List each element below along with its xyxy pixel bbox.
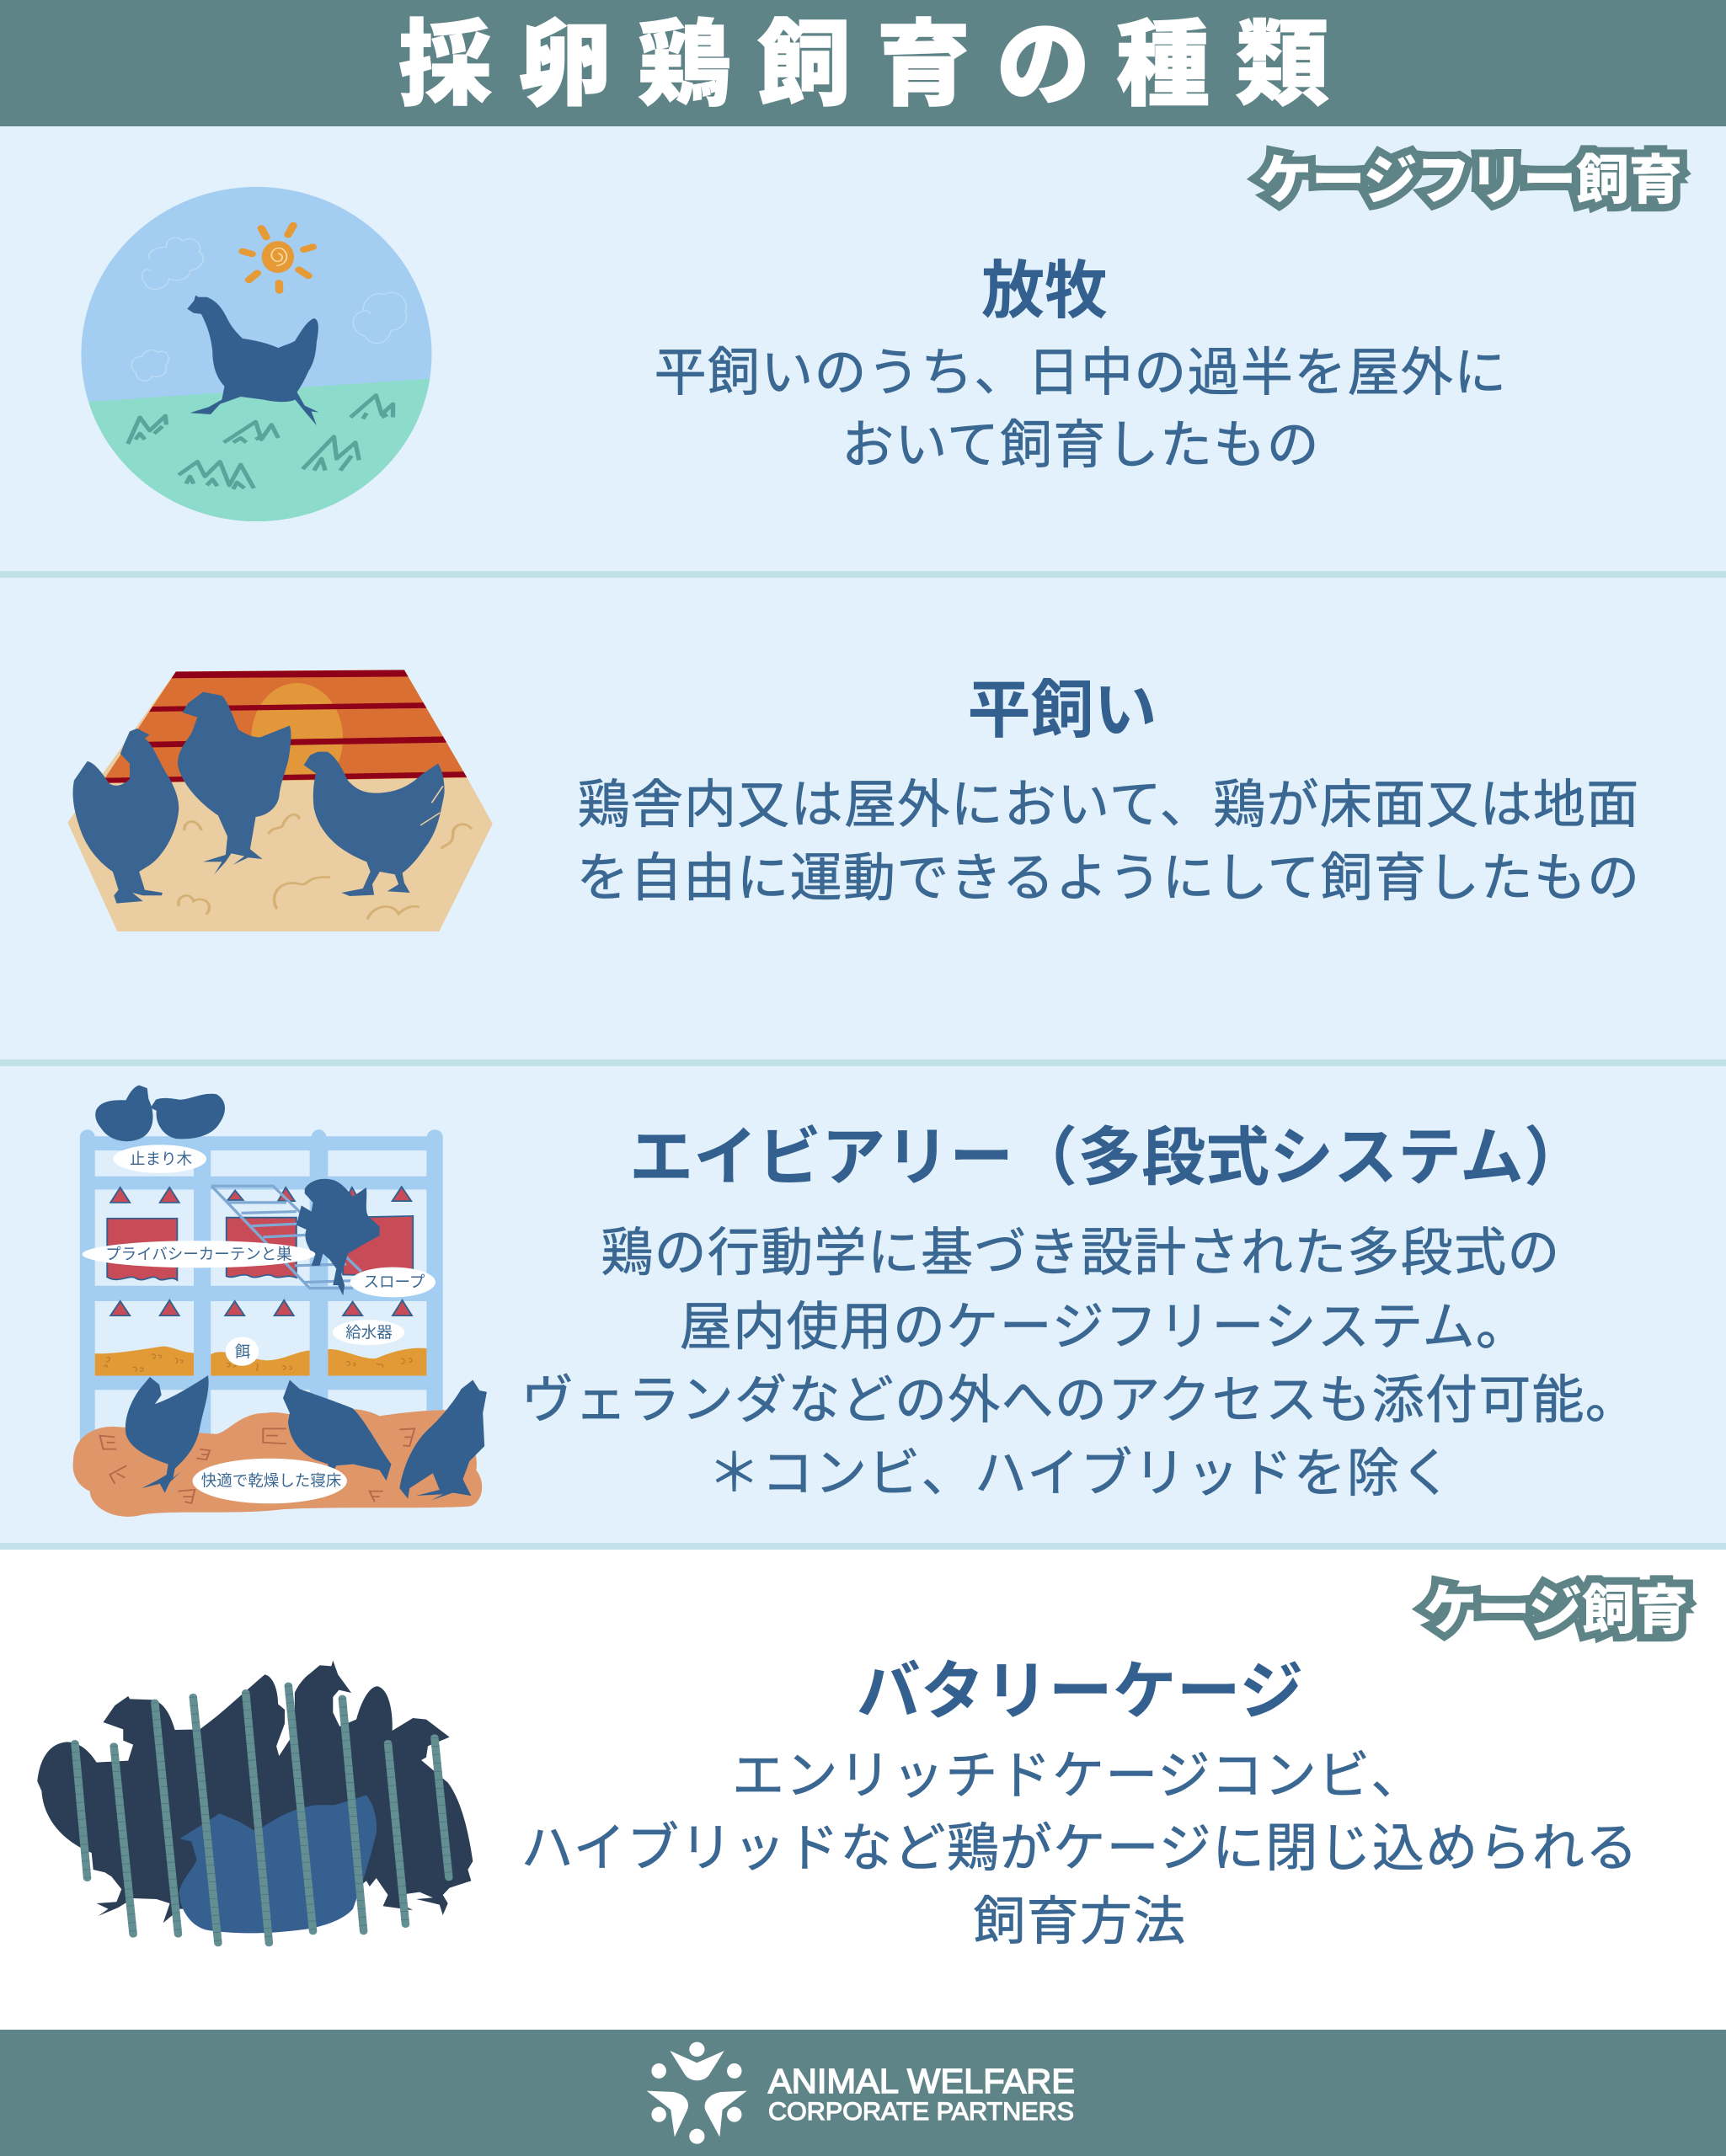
aviary labels: 餌 <box>235 1342 250 1361</box>
aviary labels: 止まり木 <box>130 1150 192 1167</box>
body: aviary: 鶏の行動学に基づき設計された多段式の <box>601 1225 1561 1282</box>
cage bars <box>75 1686 449 1943</box>
illustration: free range hen in circle <box>75 187 436 540</box>
heading: barn: 平飼い <box>967 675 1157 745</box>
illustration: barn floor with three hens <box>67 663 493 931</box>
label bubbles <box>83 1145 436 1503</box>
body: free range <box>655 344 1507 475</box>
body: aviary <box>521 1225 1638 1502</box>
header banner with title: 採卵鶏飼育の種類 <box>398 13 1355 117</box>
logo wordmark: ANIMAL WELFARE <box>768 2062 1075 2100</box>
ramp <box>211 1186 361 1289</box>
body: barn: を自由に運動できるようにして飼育したもの <box>577 849 1640 908</box>
category tag: cage free: ケージフリー飼育 <box>1258 152 1682 211</box>
header banner with title <box>0 0 1726 126</box>
heading: battery cage: バタリーケージ <box>857 1656 1303 1728</box>
aviary labels: プライバシーカーテンと巣 <box>105 1245 292 1263</box>
aviary labels <box>105 1150 425 1489</box>
body: free range: おいて飼育したもの <box>842 416 1320 475</box>
body: battery cage <box>521 1747 1638 1951</box>
body: aviary: 屋内使用のケージフリーシステム。 <box>680 1299 1529 1356</box>
body: battery cage: 飼育方法 <box>973 1893 1187 1951</box>
illustration: aviary system <box>73 1086 487 1517</box>
icon: logo <box>647 2042 747 2144</box>
aviary labels: スロープ <box>364 1273 425 1290</box>
body: free range: 平飼いのうち、日中の過半を屋外に <box>655 344 1507 403</box>
hens on the aviary <box>95 1086 487 1500</box>
illustration: battery cage hens <box>37 1661 473 1943</box>
footer banner <box>0 2030 1726 2156</box>
body: barn <box>577 776 1640 908</box>
body: barn: 鶏舎内又は屋外において、鶏が床面又は地面 <box>577 776 1640 834</box>
aviary labels: 給水器 <box>345 1324 393 1341</box>
body: aviary: ヴェランダなどの外へのアクセスも添付可能。 <box>521 1371 1638 1430</box>
aviary frame <box>80 1129 443 1452</box>
litter <box>73 1409 482 1517</box>
logo wordmark: CORPORATE PARTNERS <box>768 2098 1074 2126</box>
body: aviary: ＊コンビ、ハイブリッドを除く <box>708 1445 1453 1502</box>
body: battery cage: ハイブリッドなど鶏がケージに閉じ込められる <box>521 1819 1638 1878</box>
body: battery cage: エンリッチドケージコンビ、 <box>732 1747 1424 1806</box>
heading: free range: 放牧 <box>981 255 1108 326</box>
feed <box>95 1347 426 1376</box>
aviary labels: 快適で乾燥した寝床 <box>201 1472 341 1489</box>
logo wordmark <box>768 2062 1075 2126</box>
nests and curtains <box>107 1187 413 1315</box>
heading: aviary: エイビアリー（多段式システム） <box>629 1122 1588 1194</box>
category tag: cage: ケージ飼育 <box>1424 1582 1688 1641</box>
